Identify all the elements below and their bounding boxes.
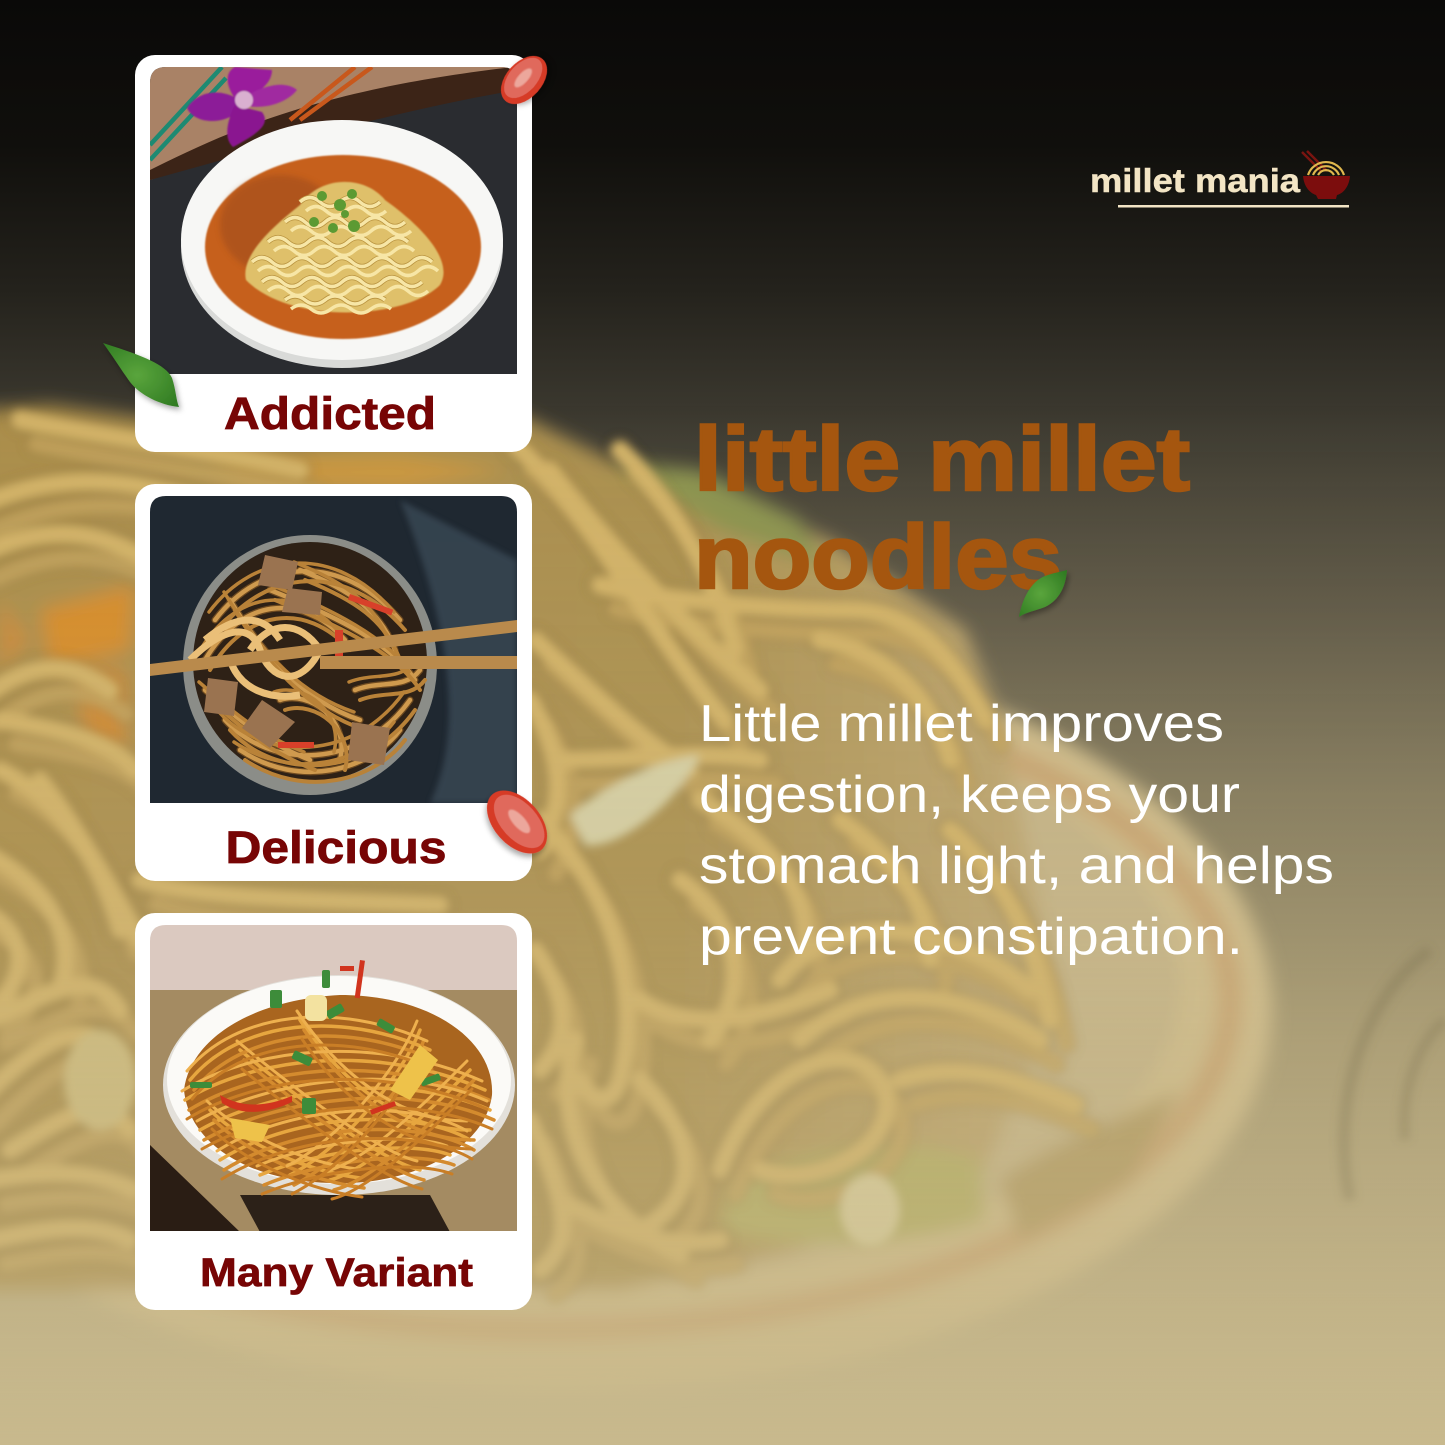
blurred noodle plate background (0, 400, 1445, 1445)
body text: stomach light, and helps (699, 837, 1334, 895)
icon: tomato slice middle (475, 779, 559, 865)
icon: orchid flower (187, 67, 297, 147)
label: Addicted (224, 388, 436, 439)
wordmark: millet mania (1090, 162, 1301, 199)
label: Many Variant (200, 1251, 473, 1295)
photo: noodle soup bowl (150, 67, 517, 374)
icon: leaf on title (1019, 570, 1067, 617)
card: Delicious (135, 484, 532, 881)
body text: prevent constipation. (699, 908, 1243, 966)
title: little millet (694, 410, 1190, 510)
icon: tomato slice top (492, 47, 556, 113)
icon: leaf on first card (103, 343, 179, 407)
underline (1118, 205, 1349, 208)
body text (699, 695, 1334, 966)
card: Many Variant (135, 913, 532, 1310)
title: noodles (694, 508, 1062, 608)
title (694, 410, 1190, 608)
label: Delicious (226, 822, 446, 873)
icon: noodle bowl (1302, 151, 1350, 199)
white bowl (181, 241, 503, 368)
body text: digestion, keeps your (699, 766, 1240, 824)
brand logo (1090, 151, 1350, 208)
photo: plate of hakka noodles (150, 925, 517, 1232)
card: Addicted (135, 55, 532, 452)
body text: Little millet improves (699, 695, 1224, 753)
photo: stir-fried noodles with chopsticks (150, 496, 517, 803)
